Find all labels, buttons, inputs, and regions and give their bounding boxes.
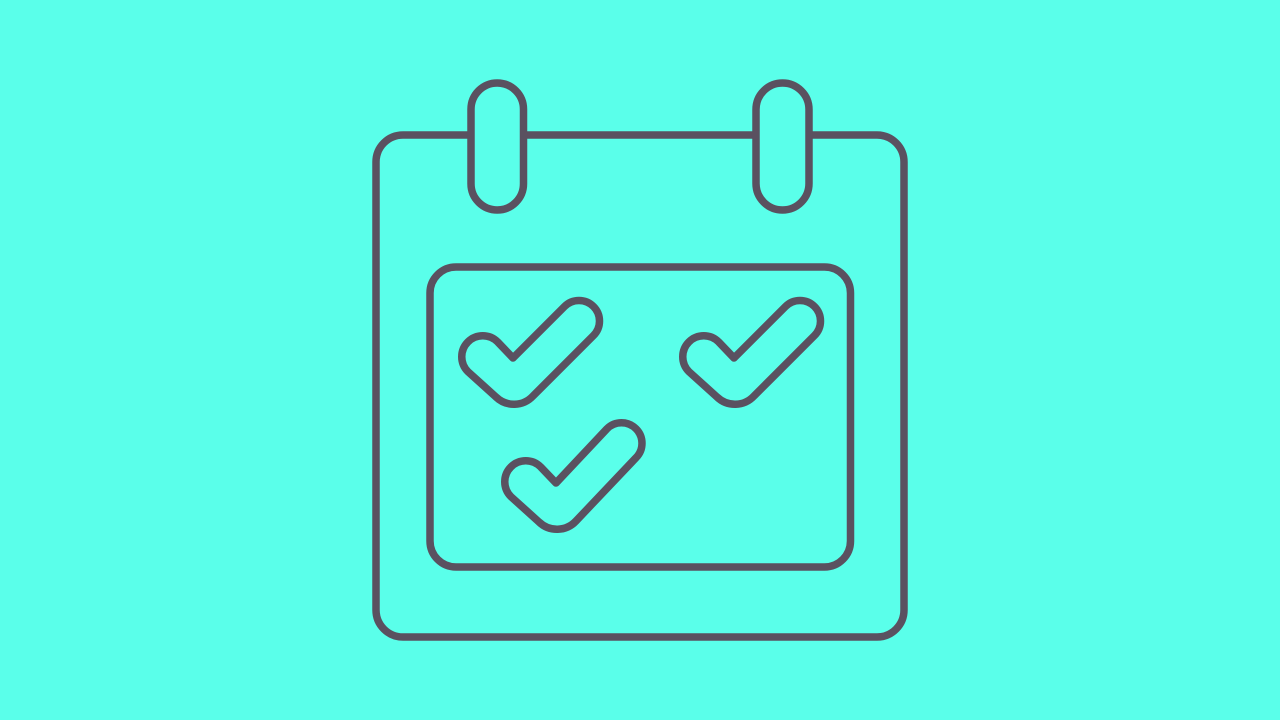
right binder ring (756, 83, 809, 210)
left binder ring (471, 83, 524, 210)
check mark: top right (683, 301, 820, 404)
calendar body outline (376, 135, 904, 637)
inner date panel (430, 267, 850, 567)
check mark: top left (462, 301, 599, 404)
check mark: bottom (505, 423, 642, 529)
